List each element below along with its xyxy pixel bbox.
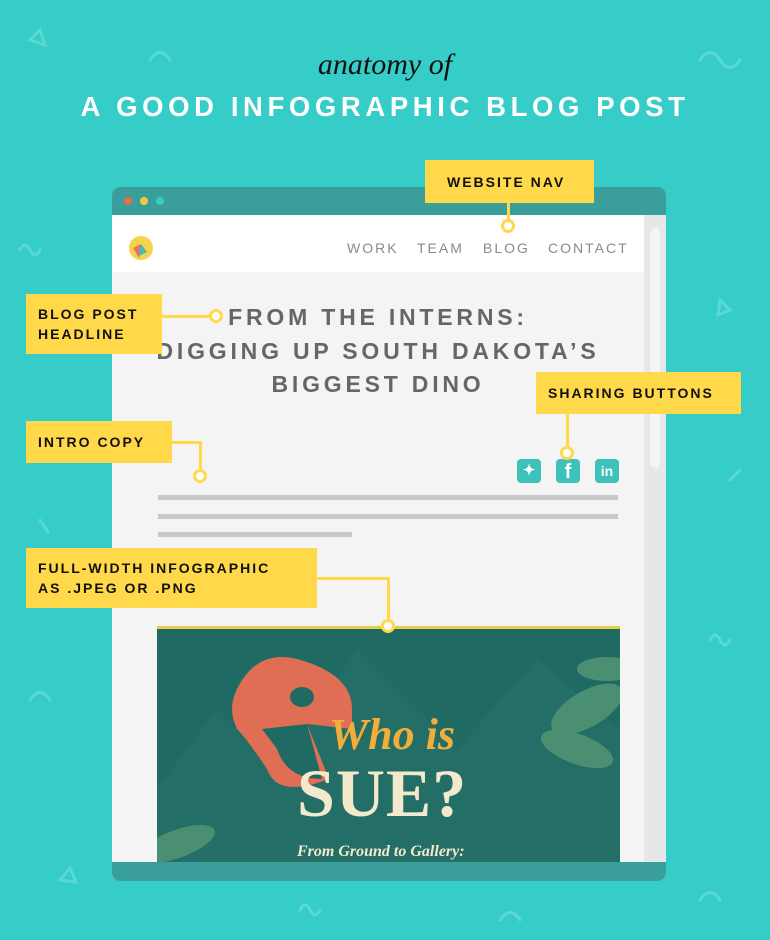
infographic image: From Ground to Gallery:	[297, 843, 465, 860]
infographic image: Who is	[329, 710, 455, 759]
headline: BIGGEST DINO	[271, 371, 484, 397]
label: blog post headline: BLOG POST	[38, 306, 138, 322]
text: TEAM	[417, 240, 464, 256]
text: CONTACT	[548, 240, 629, 256]
headline: FROM THE INTERNS:	[228, 304, 528, 330]
sharing icons	[517, 459, 619, 483]
label: blog post headline	[26, 294, 162, 354]
infographic image	[157, 626, 620, 862]
label: website nav	[425, 160, 594, 203]
label: full-width infographic	[26, 548, 317, 608]
label: full-width infographic: FULL-WIDTH INFOGRAPHIC	[38, 560, 270, 576]
nav links: WORK	[347, 240, 399, 256]
bottom bar	[112, 862, 666, 881]
title: main heading: A GOOD INFOGRAPHIC BLOG POST	[80, 91, 690, 122]
label: full-width infographic: AS .JPEG OR .PNG	[38, 580, 198, 596]
label: website nav: WEBSITE NAV	[447, 174, 565, 190]
dino skull	[232, 657, 352, 787]
label: sharing buttons: SHARING BUTTONS	[548, 385, 714, 401]
browser window	[112, 187, 666, 881]
label: intro copy	[26, 421, 172, 463]
label: blog post headline: HEADLINE	[38, 326, 126, 342]
headline: DIGGING UP SOUTH DAKOTA’S	[156, 338, 600, 364]
browser top bar	[112, 187, 666, 215]
infographic image: SUE?	[297, 755, 467, 831]
label: intro copy: INTRO COPY	[38, 434, 145, 450]
sharing icons: f	[565, 461, 571, 483]
nav bar	[112, 215, 644, 272]
sharing icons: in	[601, 463, 613, 479]
logo	[129, 236, 153, 260]
title: anatomy of: anatomy of	[318, 48, 452, 81]
scrollbar	[644, 215, 666, 865]
text: BLOG	[483, 240, 530, 256]
sharing icons: ✦	[523, 462, 535, 479]
label: sharing buttons	[536, 372, 741, 414]
headline	[156, 304, 600, 397]
intro copy lines	[158, 495, 618, 537]
